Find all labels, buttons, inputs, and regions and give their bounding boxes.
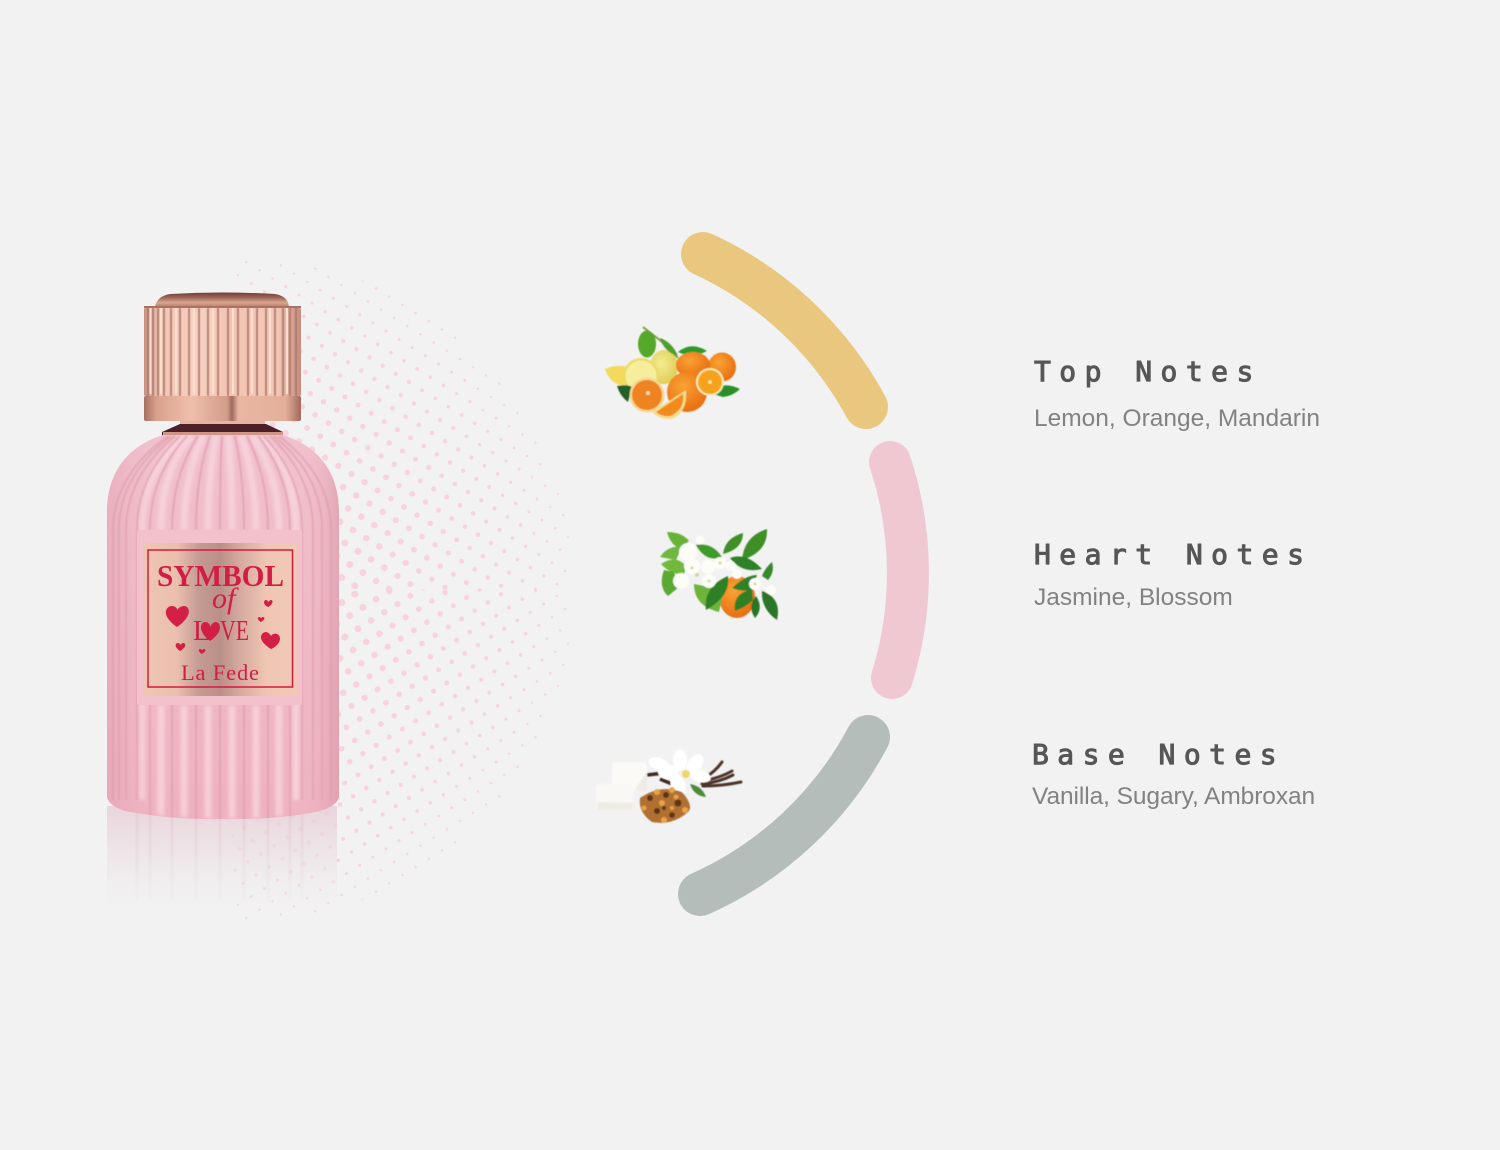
heading: heart notes: Heart Notes — [1034, 538, 1312, 571]
text: heart notes — [1034, 538, 1312, 611]
bottle reflection — [107, 806, 337, 885]
label text: LOVE: VE — [220, 616, 249, 647]
description: top notes: Lemon, Orange, Mandarin — [1034, 405, 1320, 432]
text: top notes — [1034, 355, 1320, 432]
cap ring — [144, 396, 301, 421]
label plate — [143, 543, 297, 696]
label text: of: of — [212, 582, 239, 615]
icon: citrus fruits — [605, 327, 740, 419]
label text: La Fede: La Fede — [181, 660, 259, 685]
text: base notes — [1032, 738, 1315, 810]
arc: top notes — [703, 254, 866, 407]
halftone dot semicircle — [232, 258, 569, 922]
cap dome — [155, 292, 289, 307]
icon: orange blossom — [660, 529, 778, 620]
knurled cap — [144, 306, 301, 397]
label band — [137, 530, 302, 705]
bottle neck — [162, 420, 283, 437]
arc: heart notes — [890, 462, 908, 678]
label text: LOVE: L — [193, 616, 210, 647]
icon: vanilla, sugar and amber — [596, 749, 741, 823]
description: heart notes: Jasmine, Blossom — [1034, 584, 1233, 611]
heading: top notes: Top Notes — [1034, 355, 1262, 388]
bottle body — [107, 430, 339, 822]
perfume bottle — [107, 292, 339, 822]
description: base notes: Vanilla, Sugary, Ambroxan — [1032, 783, 1315, 810]
label hearts — [166, 600, 280, 654]
label text: SYMBOL: SYMBOL — [157, 558, 284, 593]
bottle cap — [144, 292, 301, 421]
label text: LOVE — [193, 616, 249, 647]
label border — [148, 550, 292, 687]
arc: base notes — [700, 737, 868, 894]
heading: base notes: Base Notes — [1032, 738, 1285, 771]
